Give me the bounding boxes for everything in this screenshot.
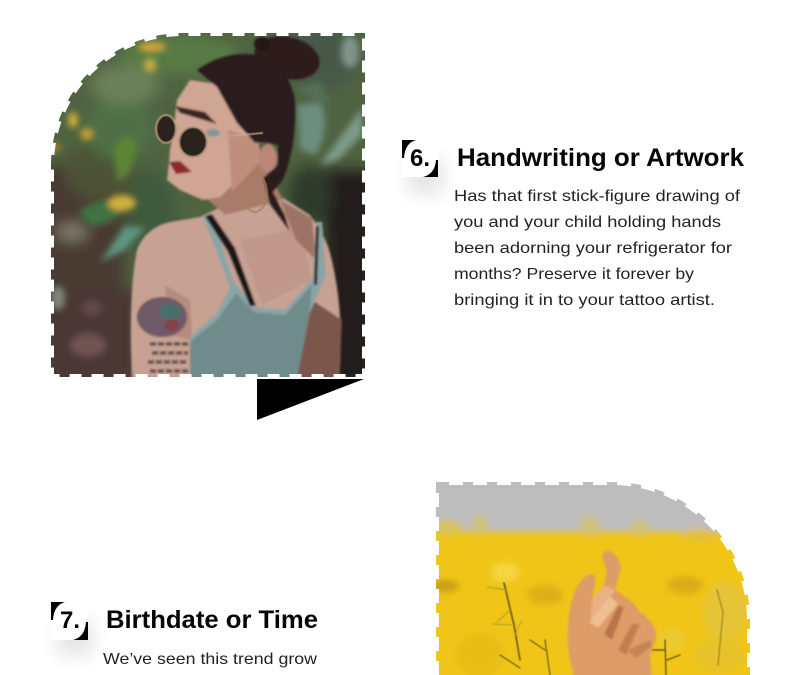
- badge 6: [402, 140, 444, 194]
- sunglasses: [156, 115, 176, 143]
- hoop earring: [243, 174, 267, 212]
- text block: handwriting description: months? Preserve it forever by: [454, 266, 694, 283]
- photo: hand in yellow flower field: [436, 482, 750, 675]
- heading: handwriting or artwork: Handwriting or Artwork: [457, 144, 744, 172]
- back and arm: [131, 198, 341, 378]
- photo: woman with sunglasses: [51, 33, 365, 377]
- bra strap: [205, 214, 256, 306]
- hand: [568, 551, 656, 675]
- text block: birthdate description: We’ve seen this trend grow: [103, 651, 317, 668]
- tattoo: [137, 297, 188, 371]
- heading: birthdate or time: Birthdate or Time: [106, 606, 318, 634]
- eyebrow: [175, 106, 217, 124]
- black folded corner: [257, 379, 364, 420]
- badge 7: 7.: [60, 607, 80, 634]
- text block: handwriting description: [454, 188, 741, 309]
- badge 6: 6.: [410, 145, 430, 172]
- tank top: [189, 216, 327, 342]
- hair: [197, 54, 295, 232]
- neck: [205, 160, 283, 215]
- badge 7: [51, 602, 93, 656]
- face: [167, 80, 262, 200]
- text block: handwriting description: you and your child holding hands: [454, 214, 721, 231]
- text block: handwriting description: Has that first stick-figure drawing of: [454, 188, 741, 205]
- ear: [259, 144, 277, 172]
- text block: handwriting description: been adorning your refrigerator for: [454, 240, 733, 257]
- lips: [169, 161, 192, 174]
- flower stems: [504, 583, 520, 660]
- text block: handwriting description: bringing it in to your tattoo artist.: [454, 292, 715, 309]
